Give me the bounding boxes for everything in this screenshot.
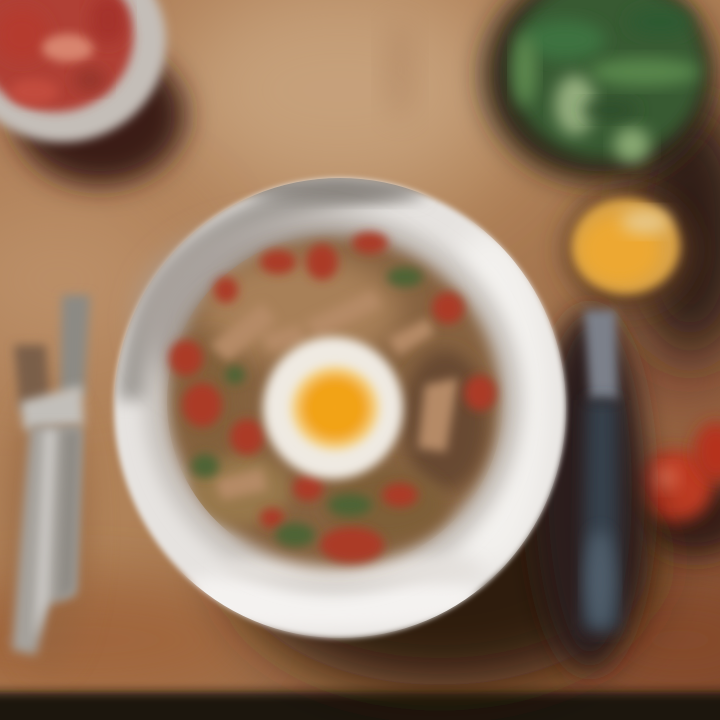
meat strips	[210, 290, 458, 500]
panel: white plate	[114, 178, 566, 638]
icon: fried egg	[263, 337, 403, 479]
icon: fork and knife, left	[6, 295, 90, 670]
panel: dark shadow behind right-side items	[625, 100, 720, 360]
tomato pieces	[169, 232, 496, 563]
panel: green salad bowl, top right	[484, 0, 712, 181]
table front edge shadow	[0, 692, 720, 720]
panel: food in the bowl	[169, 232, 501, 567]
panel: plate shadow	[230, 310, 650, 685]
icon: glass of orange juice	[566, 194, 690, 306]
icon: knife, right	[582, 310, 620, 630]
green herbs	[191, 267, 423, 547]
icon: tomatoes, right edge	[637, 422, 720, 557]
panel: red side bowl, top left	[0, 0, 185, 185]
